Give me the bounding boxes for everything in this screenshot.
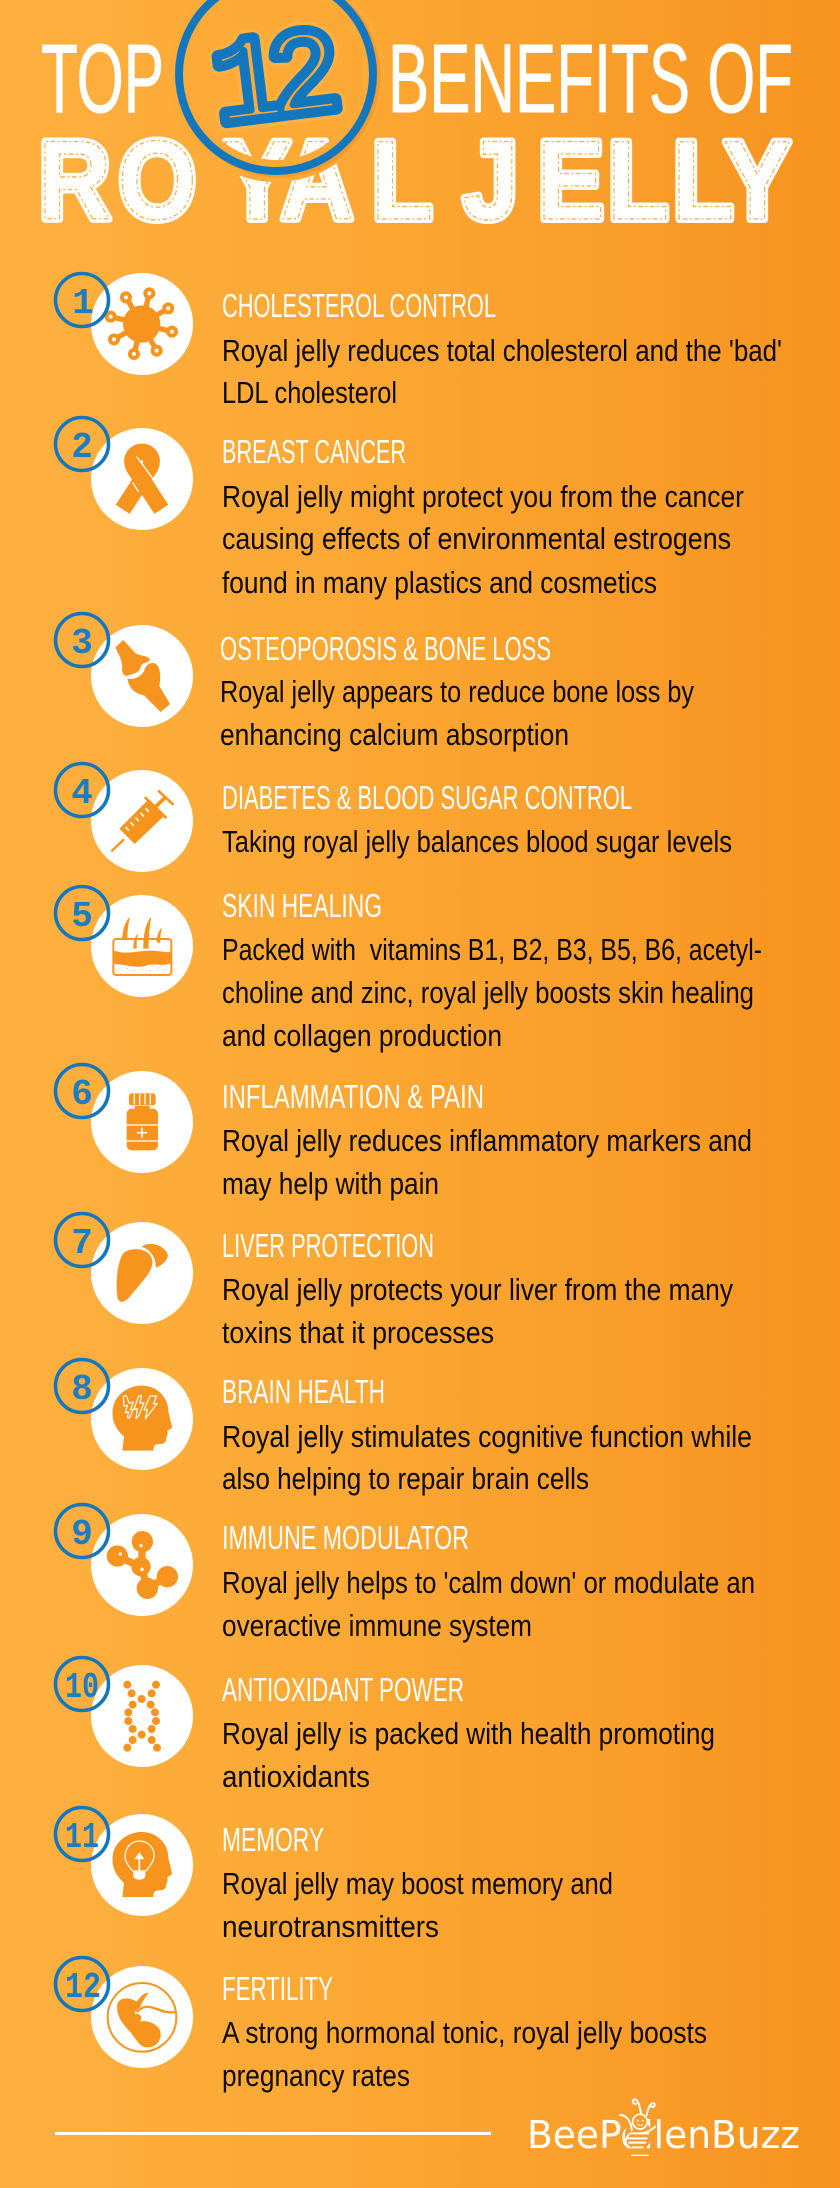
item 9: immune modulator <box>56 1504 755 1643</box>
number badge 5: 5 <box>71 896 93 937</box>
body text: also helping to repair brain cells <box>222 1461 589 1496</box>
body text: antioxidants <box>222 1759 370 1794</box>
item 2: breast cancer <box>56 418 744 600</box>
number badge 1: 1 <box>72 283 94 324</box>
body text <box>222 479 744 600</box>
number badge 10 <box>56 1658 108 1710</box>
body text: enhancing calcium absorption <box>220 717 569 752</box>
icon: liver <box>91 1222 193 1324</box>
stamp: 12 in circle: 12 <box>205 9 349 159</box>
item 5: skin healing <box>56 886 762 1053</box>
heading: MEMORY <box>222 1821 324 1858</box>
number badge 2 <box>56 418 108 470</box>
logo: BeePollenBuzz: BeePollenBuzz <box>527 2113 800 2157</box>
body text: Royal jelly reduces inflammatory markers and <box>222 1123 752 1158</box>
body text: neurotransmitters <box>222 1909 439 1944</box>
number badge 5 <box>56 886 108 940</box>
number badge 3 <box>56 614 108 666</box>
icon: head with light bulb <box>91 1814 193 1916</box>
body text: Royal jelly is packed with health promoting <box>222 1716 715 1751</box>
item 6: inflammation <box>56 1064 752 1201</box>
icon: DNA helix dots <box>91 1665 193 1767</box>
number badge 6: 6 <box>71 1074 93 1115</box>
heading: ANTIOXIDANT POWER <box>222 1671 464 1708</box>
heading: CHOLESTEROL CONTROL <box>222 287 496 324</box>
body text <box>220 674 694 752</box>
icon: head with lightning <box>91 1368 193 1470</box>
icon: bee <box>620 2099 655 2155</box>
body text: Royal jelly may boost memory and <box>222 1866 613 1901</box>
body text <box>222 1272 733 1350</box>
body text: Royal jelly stimulates cognitive function while <box>222 1419 752 1454</box>
body text <box>222 1565 755 1643</box>
body text: Royal jelly appears to reduce bone loss by <box>220 674 694 709</box>
icon: fetus in circle <box>91 1966 193 2068</box>
heading: FERTILITY <box>222 1970 333 2007</box>
item 12: fertility <box>56 1958 707 2093</box>
heading: BREAST CANCER <box>222 433 406 470</box>
title line: ROYAL JELLY: ROYAL JELLY <box>38 118 791 243</box>
number badge 6 <box>56 1064 108 1118</box>
icon: skin layers <box>91 895 193 997</box>
icon: awareness ribbon <box>91 428 193 530</box>
item 10: antioxidant power <box>56 1658 715 1794</box>
body text: may help with pain <box>222 1166 439 1201</box>
number badge 8: 8 <box>71 1369 93 1410</box>
body text: A strong hormonal tonic, royal jelly boosts <box>222 2015 707 2050</box>
item 3: osteoporosis <box>56 614 694 752</box>
body text: overactive immune system <box>222 1608 532 1643</box>
body text: LDL cholesterol <box>222 375 397 410</box>
stamp: 12 in circle: 12 <box>205 9 349 159</box>
icon: molecule nodes <box>91 1514 193 1616</box>
item 1: cholesterol control <box>56 273 782 410</box>
icon: pill bottle <box>91 1071 193 1173</box>
heading: BRAIN HEALTH <box>222 1373 385 1410</box>
number badge 10: 10 <box>65 1667 99 1708</box>
icon: syringe <box>91 770 193 872</box>
body text <box>222 1866 613 1944</box>
body text <box>222 1419 752 1496</box>
number badge 9 <box>56 1504 108 1558</box>
body text <box>222 333 782 410</box>
body text: causing effects of environmental estrogens <box>222 521 731 556</box>
body text: Royal jelly protects your liver from the many <box>222 1272 733 1307</box>
number badge 2: 2 <box>71 427 93 468</box>
item 4: diabetes <box>56 764 732 872</box>
item 7: liver <box>56 1214 733 1350</box>
number badge 11: 11 <box>65 1817 99 1858</box>
item 8: brain health <box>56 1360 752 1496</box>
body text: and collagen production <box>222 1018 502 1053</box>
title <box>38 0 793 243</box>
body text: found in many plastics and cosmetics <box>222 565 657 600</box>
icon: bone joint <box>91 625 193 727</box>
number badge 9: 9 <box>71 1514 93 1555</box>
title line: TOP: TOP <box>41 24 164 133</box>
body text <box>222 932 762 1053</box>
number badge 12: 12 <box>65 1967 101 2008</box>
number badge 4 <box>56 764 108 816</box>
number badge 7: 7 <box>71 1223 93 1264</box>
number badge 11 <box>56 1808 108 1860</box>
heading: DIABETES & BLOOD SUGAR CONTROL <box>222 779 632 816</box>
number badge 1 <box>56 274 108 326</box>
number badge 4: 4 <box>71 773 93 814</box>
heading: SKIN HEALING <box>222 887 382 924</box>
number badge 12 <box>56 1958 108 2010</box>
body text <box>222 1716 715 1794</box>
number badge 3: 3 <box>71 623 93 664</box>
heading: IMMUNE MODULATOR <box>222 1519 469 1556</box>
body text: pregnancy rates <box>222 2058 410 2093</box>
stamp: 12 in circle <box>179 0 378 175</box>
heading: OSTEOPOROSIS & BONE LOSS <box>220 630 551 667</box>
number badge 8 <box>56 1360 108 1412</box>
heading: INFLAMMATION & PAIN <box>222 1078 484 1115</box>
body text: toxins that it processes <box>222 1315 494 1350</box>
title line: ROYAL JELLY: ROYAL JELLY <box>38 118 791 243</box>
heading: LIVER PROTECTION <box>222 1227 434 1264</box>
number badge 7 <box>56 1214 108 1266</box>
body text: Royal jelly might protect you from the cancer <box>222 479 744 514</box>
body text <box>222 1123 752 1201</box>
icon: cholesterol molecule <box>91 273 193 375</box>
body text: Taking royal jelly balances blood sugar levels <box>222 824 732 859</box>
stamp: 12 in circle: 12 <box>205 9 349 159</box>
item 11: memory <box>56 1808 613 1944</box>
body text <box>222 2015 707 2093</box>
